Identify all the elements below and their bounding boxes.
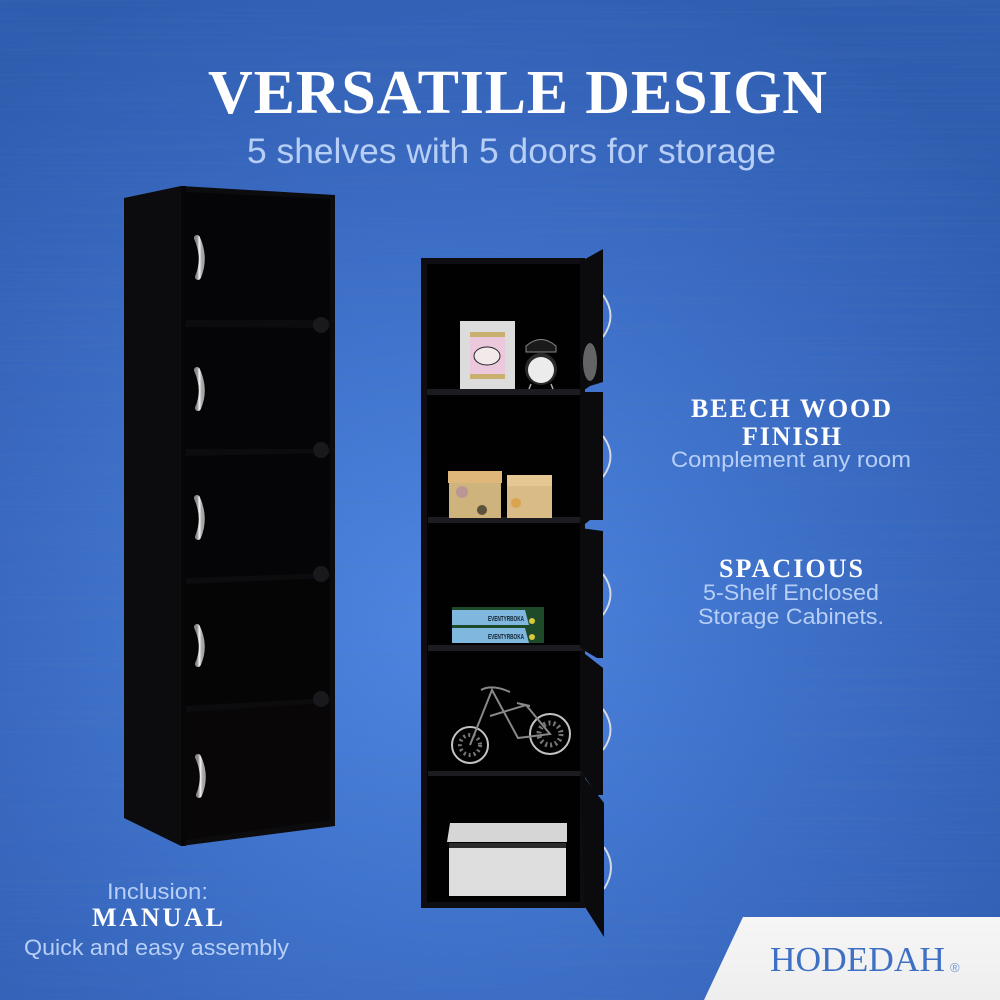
- subtitle: 5 shelves with 5 doors for storage: [247, 131, 776, 171]
- open cabinet: [421, 249, 611, 937]
- bicycle: [452, 687, 570, 763]
- feature: beech wood finish: FINISH: [742, 422, 841, 451]
- alarm clock: [525, 340, 557, 389]
- feature: spacious: SPACIOUS: [719, 554, 863, 583]
- inclusion note: [24, 879, 290, 960]
- feature: beech wood finish: BEECH WOOD: [691, 394, 891, 423]
- closed cabinet: [124, 186, 335, 846]
- logo: HODEDAH: [770, 940, 945, 979]
- feature: spacious: [698, 554, 884, 629]
- doors: [580, 249, 603, 393]
- logo panel: ®: [950, 960, 960, 975]
- inclusion note: Inclusion:: [107, 879, 208, 904]
- white trunk: [447, 823, 567, 896]
- logo panel: [704, 917, 1000, 1000]
- handles: [197, 238, 203, 795]
- photo frame: [460, 321, 515, 389]
- books: EVENTYRBOKA: [488, 616, 524, 623]
- books: EVENTYRBOKA: [488, 634, 524, 641]
- inclusion note: Quick and easy assembly: [24, 935, 290, 960]
- feature: beech wood finish: [671, 394, 911, 472]
- inclusion note: MANUAL: [92, 903, 223, 932]
- door handles: [603, 295, 611, 889]
- gift boxes: [448, 471, 552, 518]
- feature: spacious: Storage Cabinets.: [698, 604, 884, 629]
- feature: spacious: 5-Shelf Enclosed: [703, 580, 879, 605]
- books: [452, 607, 544, 643]
- title: VERSATILE DESIGN: [208, 59, 827, 127]
- feature: beech wood finish: Complement any room: [671, 447, 911, 472]
